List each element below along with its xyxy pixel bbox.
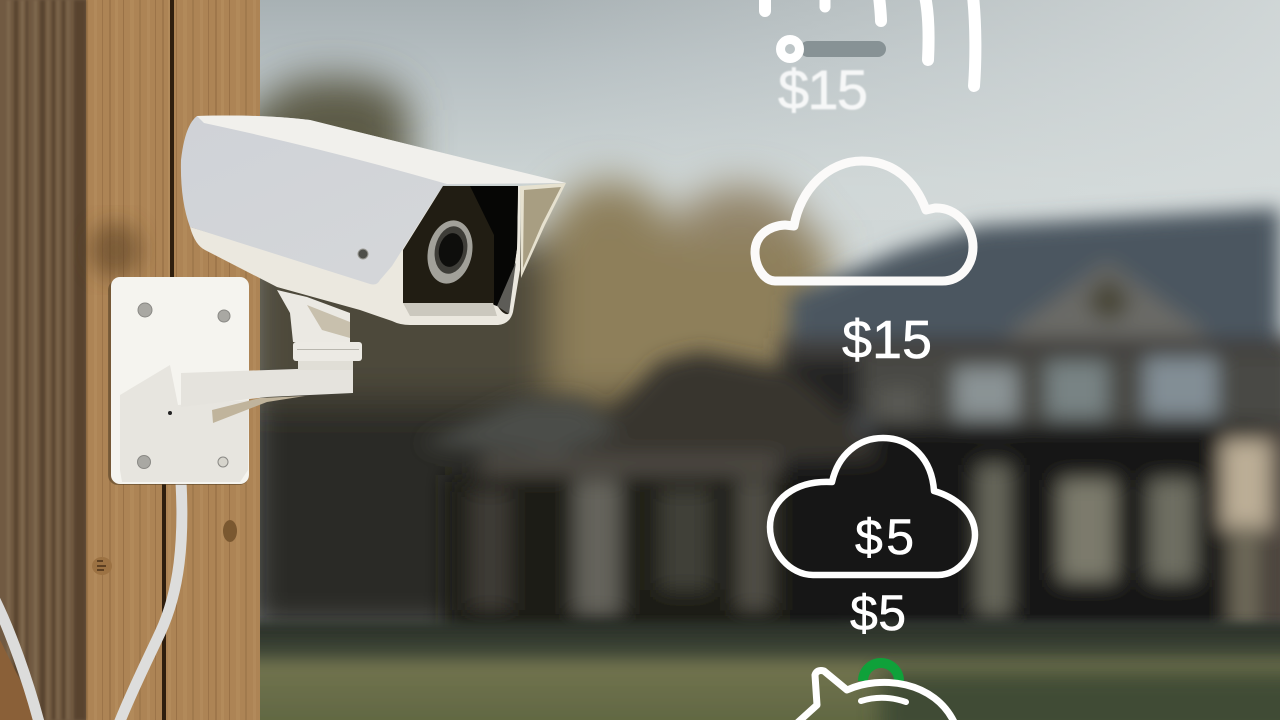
- camera body: [181, 116, 566, 325]
- cloud icon with price $15: $15: [842, 310, 932, 370]
- hood top: [181, 116, 566, 284]
- rain strokes: [765, 0, 975, 86]
- background trees: [240, 77, 860, 640]
- top icon fragment: [765, 0, 975, 121]
- hood side: [520, 183, 566, 278]
- dark left face: [0, 0, 86, 720]
- cloud icon with price $5: [770, 438, 975, 575]
- lens: [422, 216, 478, 288]
- wall mount plate: [108, 277, 249, 485]
- background house: [420, 208, 1280, 635]
- cloud icon with price $15: [755, 161, 973, 370]
- progress slider: [780, 40, 886, 58]
- price $5: $5: [850, 585, 906, 641]
- top price: $15: [778, 58, 868, 121]
- wooden post: [0, 0, 260, 720]
- plank grooves: [170, 0, 174, 280]
- lower housing: [190, 186, 520, 325]
- piggy bank icon: [796, 663, 955, 720]
- lawn: [230, 622, 1280, 720]
- camera arm: [181, 290, 362, 423]
- knots: [92, 557, 112, 575]
- screws: [138, 303, 230, 468]
- cables: [0, 482, 182, 720]
- lens recess: [403, 186, 518, 314]
- cloud icon with price $5: $5: [855, 509, 914, 565]
